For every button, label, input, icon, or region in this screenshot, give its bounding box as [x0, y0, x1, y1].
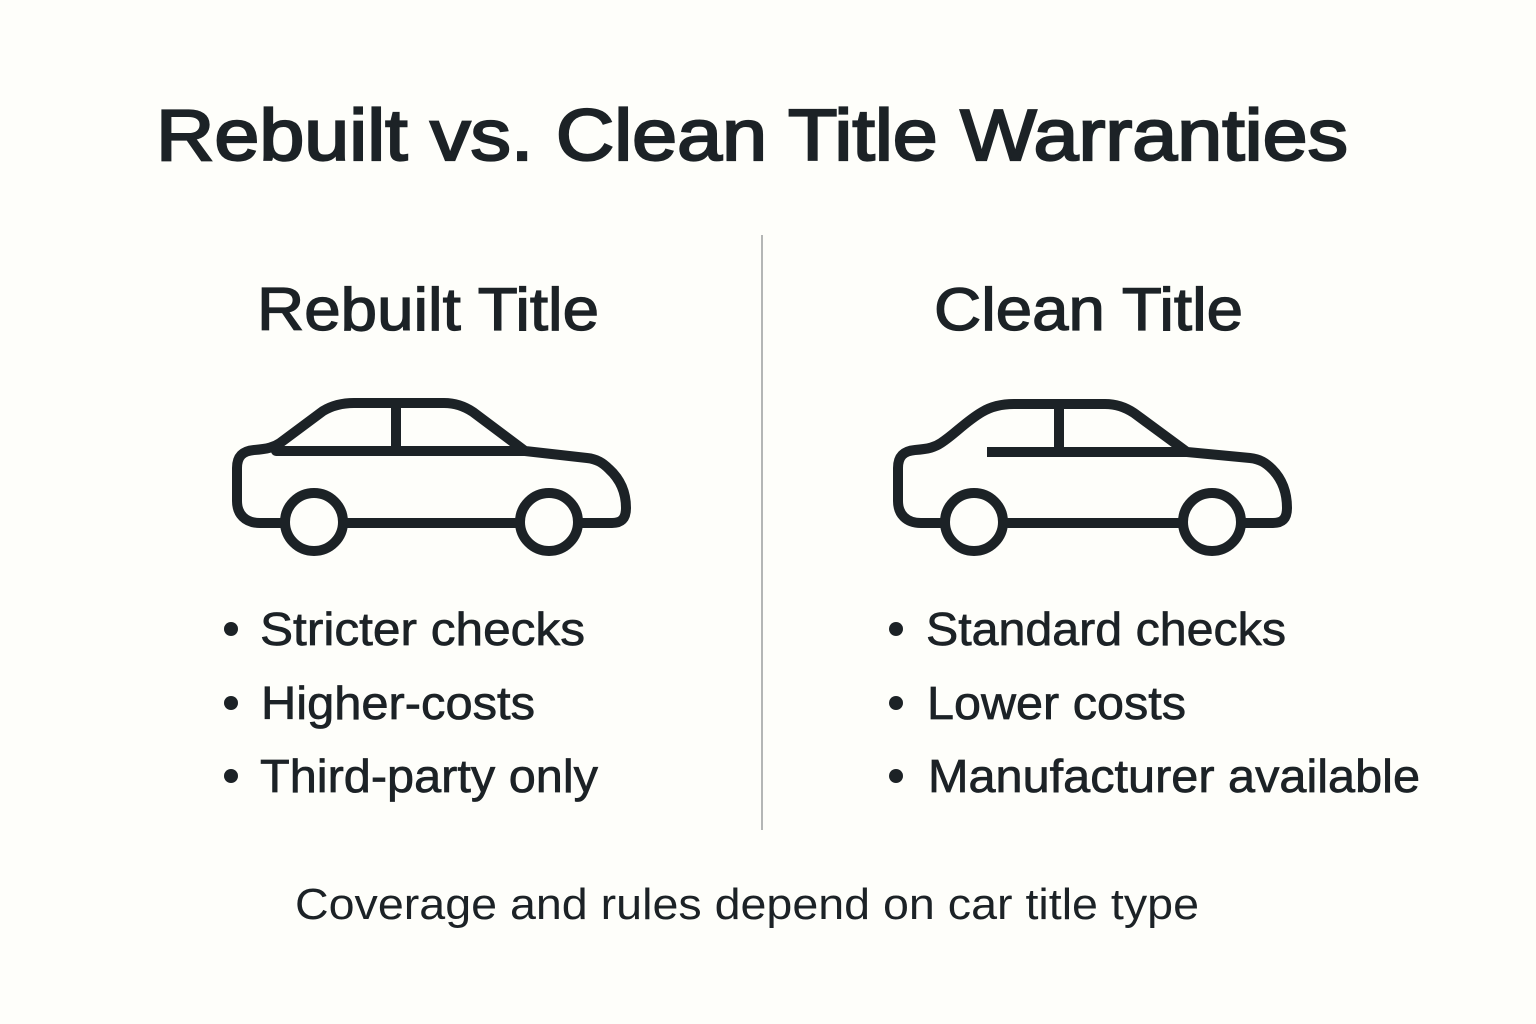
- divider between columns: [761, 235, 763, 830]
- panel: rebuilt title: [224, 276, 626, 802]
- bullet: lower costs: Lower costs: [927, 677, 1186, 729]
- icon: clean car: [898, 404, 1287, 551]
- bullet: standard checks: Standard checks: [926, 603, 1286, 655]
- bullet list: clean title: [889, 603, 1420, 802]
- footer caption: Coverage and rules depend on car title type: [295, 880, 1199, 929]
- panel: clean title: [889, 276, 1420, 802]
- bullet: stricter checks: Stricter checks: [260, 603, 585, 655]
- bullet: manufacturer available: Manufacturer available: [928, 750, 1420, 802]
- bullet: third-party only: Third-party only: [260, 750, 598, 802]
- bullet list: rebuilt title: [224, 603, 598, 802]
- icon: rebuilt car: [237, 403, 626, 551]
- heading: clean title: Clean Title: [934, 276, 1243, 343]
- bullet: higher costs: Higher-costs: [261, 677, 535, 729]
- heading: rebuilt title: Rebuilt Title: [257, 276, 599, 343]
- title: Rebuilt vs. Clean Title Warranties: [156, 96, 1348, 176]
